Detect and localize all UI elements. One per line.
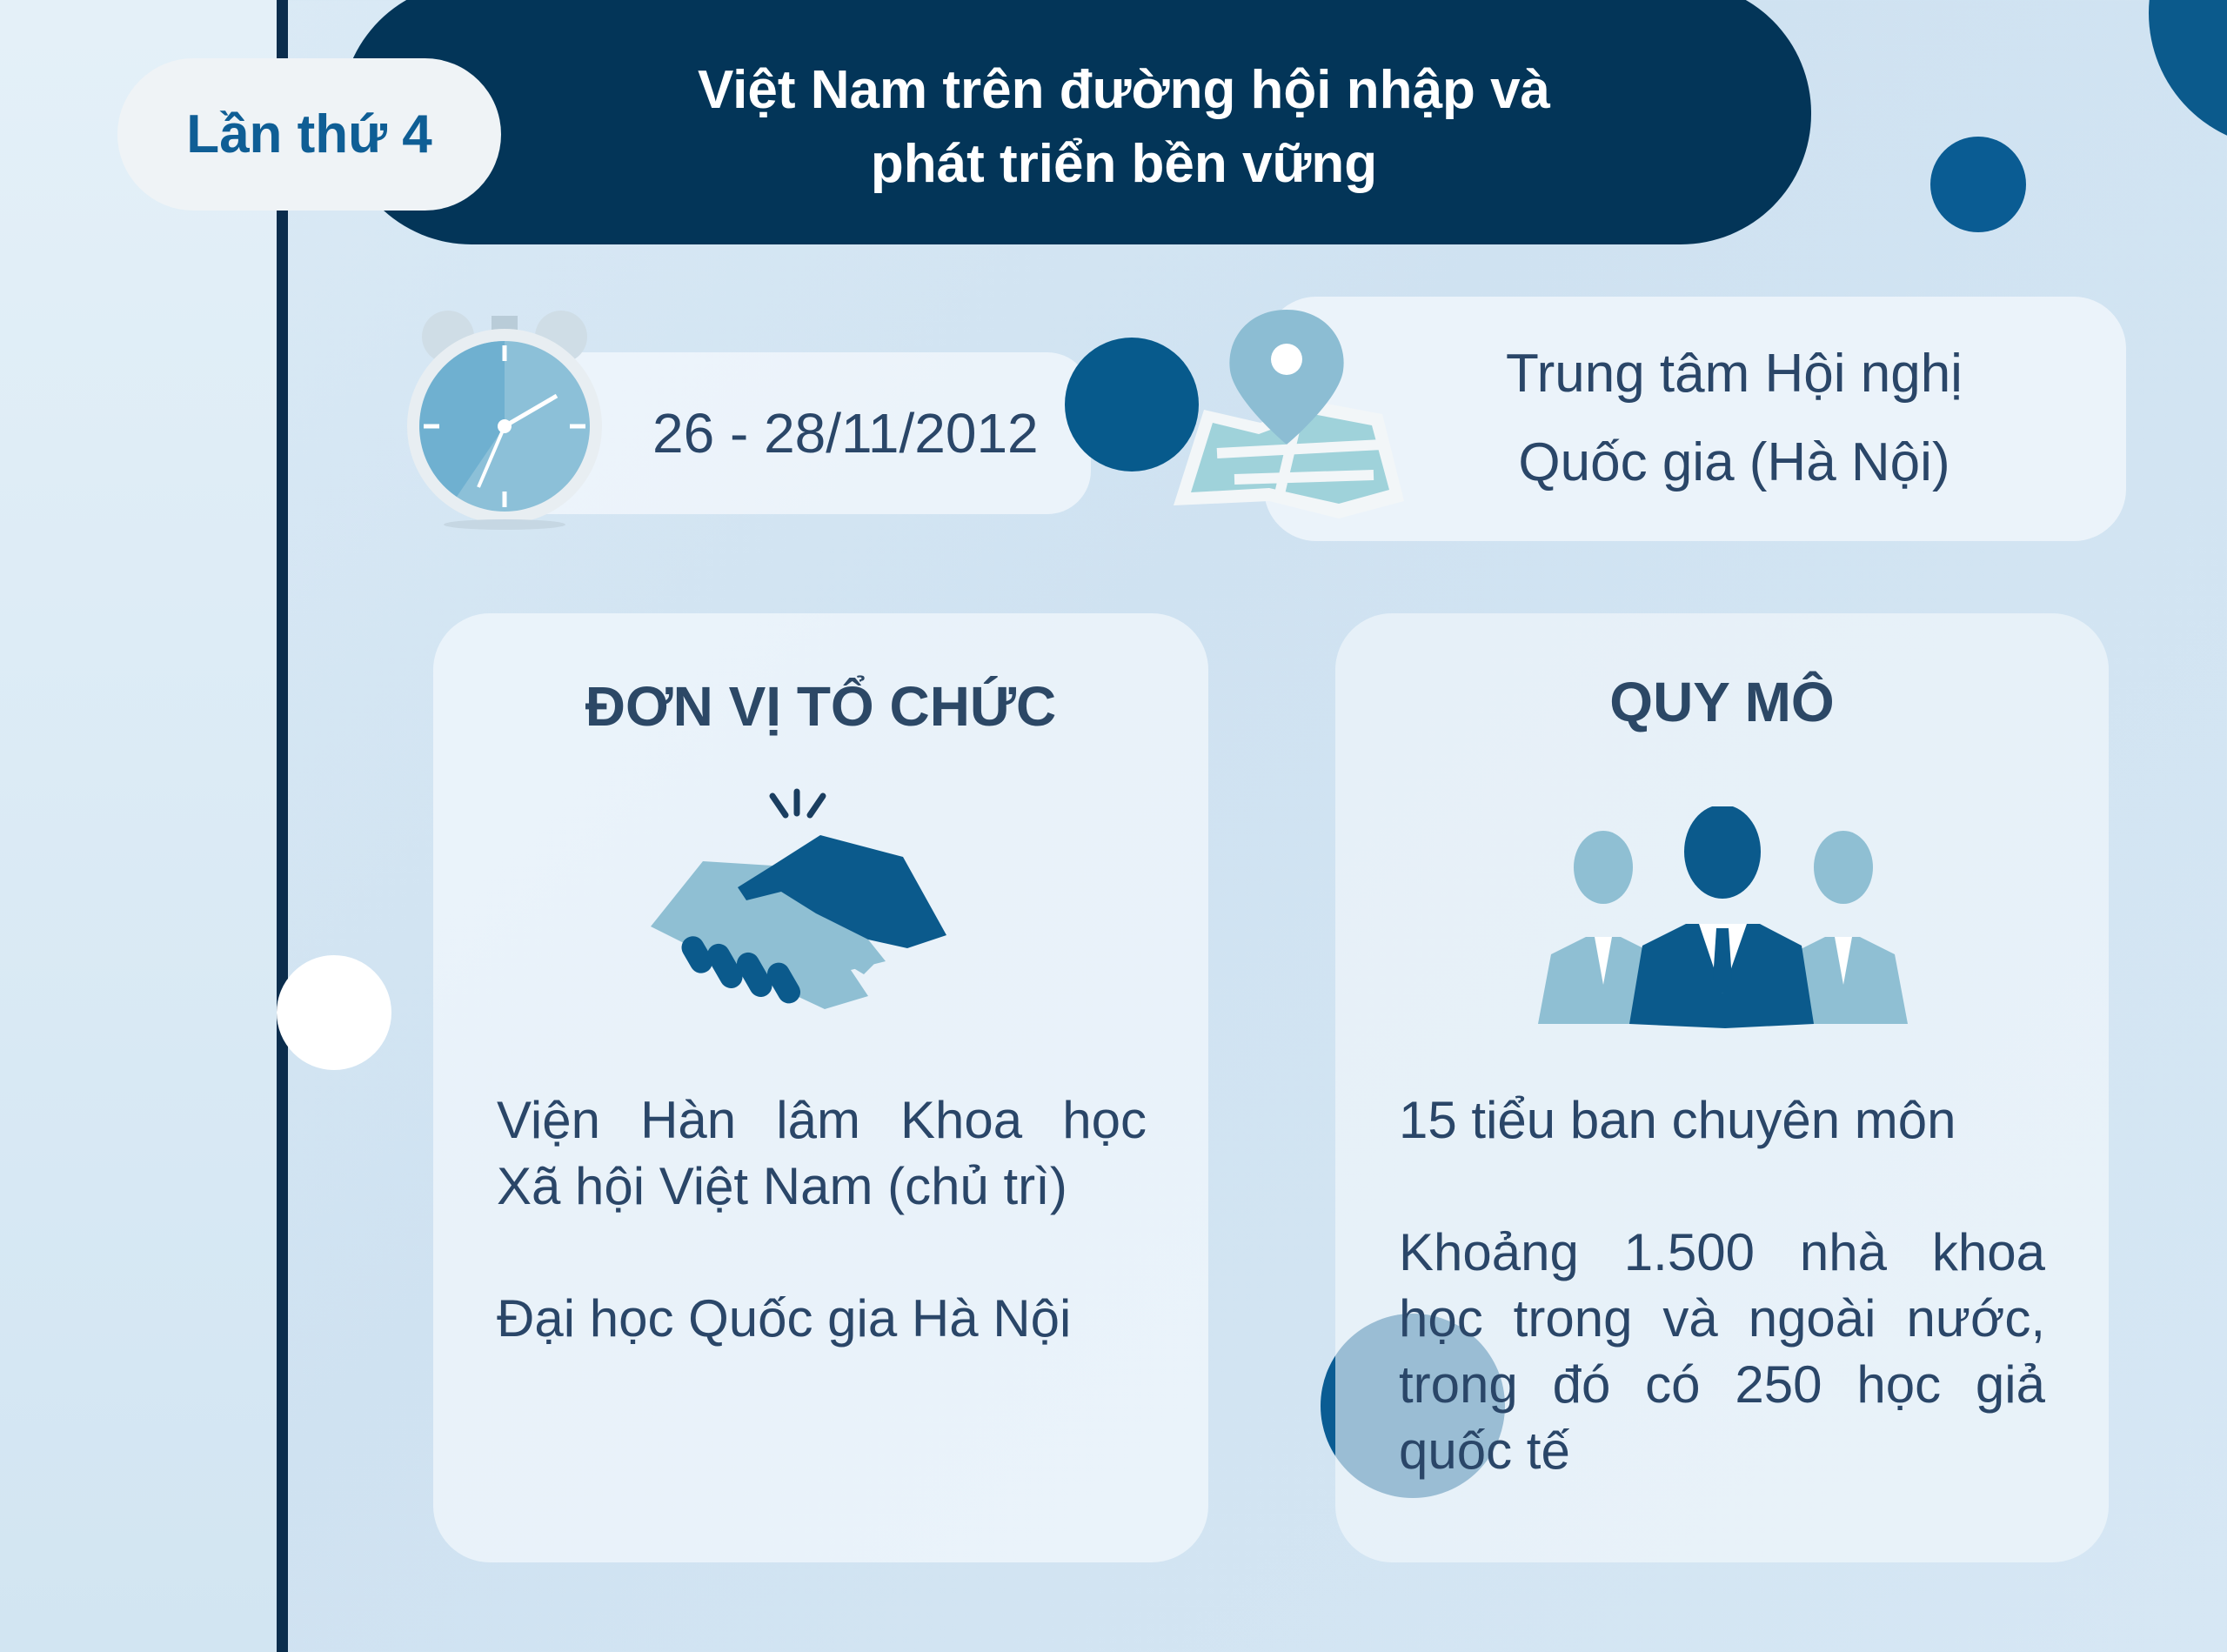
panel: scale [1335,613,2109,1562]
location pill: Trung tâm Hội nghị [1506,344,1963,404]
text: organizers list: Đại học Quốc gia Hà Nội [497,1289,1071,1348]
text: organizers list [497,1091,1147,1348]
vertical timeline line [277,0,288,1652]
icon: clock [407,311,602,530]
decorative circle top right [2149,0,2227,148]
heading: organizers: ĐƠN VỊ TỔ CHỨC [585,675,1056,738]
edition badge: Lần thứ 4 [186,104,432,164]
decorative white circle [277,955,391,1070]
text: organizers list: Xã hội Việt Nam (chủ trì) [497,1157,1067,1215]
text: scale details: 15 tiểu ban chuyên môn [1399,1091,1956,1149]
icon: map pin [1174,310,1389,505]
location pill [1264,297,2126,541]
panel: organizers [433,613,1208,1562]
title banner [341,0,1811,244]
heading: scale: QUY MÔ [1609,671,1835,733]
icon: people [1538,806,1908,1028]
title banner: phát triển bền vững [871,134,1377,194]
icon: handshake [651,788,946,1009]
location pill: Quốc gia (Hà Nội) [1518,432,1950,492]
date pill: 26 - 28/11/2012 [652,402,1039,465]
date pill [505,352,1091,514]
text: scale details [1399,1091,2045,1480]
title banner: Việt Nam trên đường hội nhập và [698,60,1550,120]
right decorative circle behind panel [1321,1314,1505,1498]
text: scale details: Khoảng 1.500 nhà khoa học trong và ngoài nước, trong đó có 250 học giả quốc tế [1399,1223,2045,1480]
left strip background [0,0,280,1652]
edition badge [117,58,501,211]
text: organizers list: Viện Hàn lâm Khoa học [497,1091,1147,1149]
decorative small circle [1930,137,2026,232]
decorative circle between pills [1065,338,1199,472]
